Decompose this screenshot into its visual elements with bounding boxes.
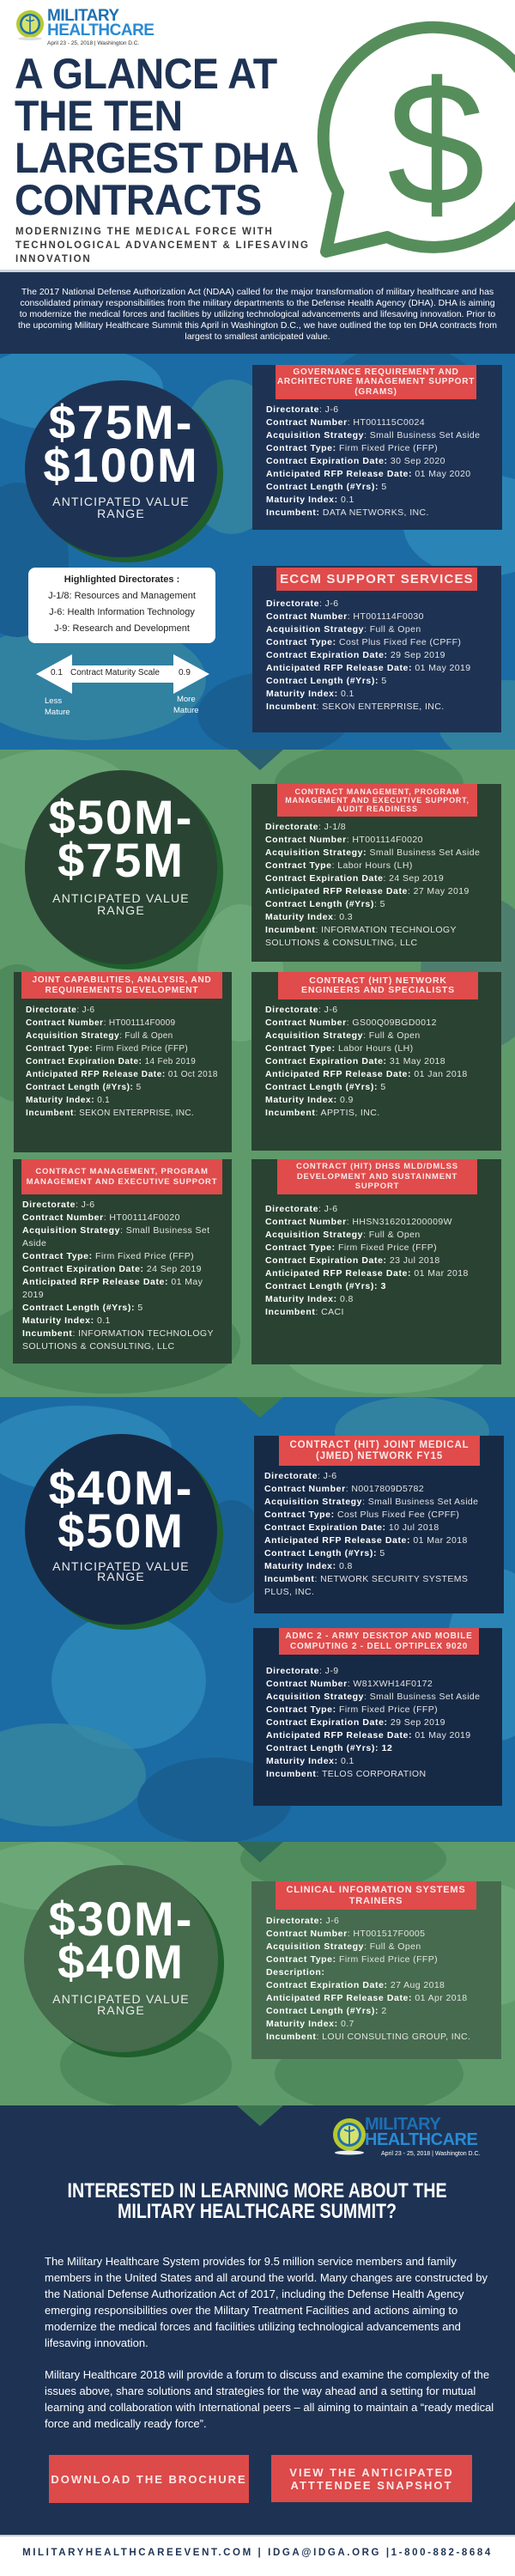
icon: logo emblem xyxy=(16,10,44,40)
card: GRAMS: Maturity Index: 0.1 xyxy=(266,495,354,505)
card: JMED network: Acquisition Strategy: Small Business Set Aside xyxy=(264,1497,478,1507)
card: ADMC 2: Anticipated RFP Release Date: 01 May 2019 xyxy=(266,1730,471,1741)
heading: interested in learning more: INTERESTED IN LEARNING MORE ABOUT THE xyxy=(68,2179,447,2202)
card: contract management executive support: Contract Expiration Date: 24 Sep 2019 xyxy=(22,1264,202,1274)
text block: summit description: The Military Healthcare System provides for 9.5 million service members and family members in the United States and all around the world. Many changes are constructed by the National Defense Authorization Act of 2017, including the Defense Health Agency emerging responsibilities over the Military Treatment Facilities and actions aiming to modernize the medical forces and facilities utilizing technological advancements and lifesaving innovation. xyxy=(45,2255,488,2349)
footer logo: MILITARY xyxy=(365,2115,440,2134)
card: network engineers: Incumbent: APPTIS, INC. xyxy=(265,1108,380,1118)
circle: $50M-$75M: $75M xyxy=(58,833,185,887)
card: ECCM: Incumbent: SEKON ENTERPRISE, INC. xyxy=(266,702,445,712)
card: contract management executive support xyxy=(13,1159,232,1364)
card: network engineers: Contract Length (#Yrs): 5 xyxy=(265,1082,386,1092)
circle: $30M-$40M: ANTICIPATED VALUE xyxy=(52,1992,190,2006)
card: ECCM: Directorate: J-6 xyxy=(266,598,338,609)
card: contract management audit readiness: Contract Number: HT001114F0020 xyxy=(265,835,423,845)
title xyxy=(15,50,299,224)
card: JMED network: Contract Expiration Date: 10 Jul 2018 xyxy=(264,1522,439,1533)
card: JMED network: Maturity Index: 0.8 xyxy=(264,1561,353,1571)
highlighted directorates box: J-1/8: Resources and Management xyxy=(48,591,196,601)
heading: interested in learning more xyxy=(68,2179,447,2223)
circle: $40M-$50M: RANGE xyxy=(97,1570,145,1583)
card: JMED network: Contract Length (#Yrs): 5 xyxy=(264,1548,385,1558)
arrow: contract maturity scale: 0.9 xyxy=(179,668,191,677)
circle: $30M-$40M: $40M xyxy=(58,1935,185,1989)
card: clinical information systems trainers: Contract Number: HT001517F0005 xyxy=(266,1929,425,1939)
card: contract management executive support: Directorate: J-6 xyxy=(22,1200,94,1210)
card: ECCM: ECCM SUPPORT SERVICES xyxy=(280,572,474,586)
circle: $75M-$100M: $100M xyxy=(43,438,199,492)
card: network engineers xyxy=(251,972,501,1151)
button: attendee snapshot: VIEW THE ANTICIPATED xyxy=(289,2466,454,2478)
card: joint capabilities: Acquisition Strategy: Full & Open xyxy=(26,1031,173,1041)
card: contract management audit readiness: Contract Type: Labor Hours (LH) xyxy=(265,860,413,871)
card: joint capabilities xyxy=(14,972,232,1152)
circle: $40M-$50M: $40M- xyxy=(49,1461,193,1515)
card: contract management audit readiness: CONTRACT MANAGEMENT, PROGRAM MANAGEMENT AND EXECUTIVE SUPPORT, AUDIT READINESS xyxy=(285,787,470,813)
card: GRAMS: Contract Expiration Date: 30 Sep 2020 xyxy=(266,456,445,466)
card: clinical information systems trainers: Contract Length (#Yrs): 2 xyxy=(266,2006,387,2016)
card: JMED network: Incumbent: NETWORK SECURITY SYSTEMS PLUS, INC. xyxy=(264,1574,468,1597)
circle: $75M-$100M: ANTICIPATED VALUE xyxy=(52,495,190,508)
logo text: MILITARY xyxy=(47,7,119,25)
arrow: contract maturity scale: 0.1 xyxy=(51,668,63,677)
highlighted directorates box xyxy=(28,568,215,643)
card: clinical information systems trainers: Incumbent: LOUI CONSULTING GROUP, INC. xyxy=(266,2032,470,2042)
card: joint capabilities: Directorate: J-6 xyxy=(26,1005,94,1015)
card: network engineers: Anticipated RFP Release Date: 01 Jan 2018 xyxy=(265,1069,468,1079)
panel: $30M-$40M section xyxy=(0,1842,515,2105)
card: joint capabilities: JOINT CAPABILITIES, ANALYSIS, AND REQUIREMENTS DEVELOPMENT xyxy=(32,975,211,994)
intro band xyxy=(0,270,515,354)
arrow: contract maturity scale xyxy=(36,654,209,717)
card: ADMC 2 xyxy=(253,1628,502,1806)
card: JMED network: Contract Number: N0017809D5782 xyxy=(264,1484,424,1494)
text block: summit description xyxy=(45,2255,494,2430)
card: DHSS MLD/DMLSS: Incumbent: CACI xyxy=(265,1307,344,1317)
card: GRAMS: Anticipated RFP Release Date: 01 May 2020 xyxy=(266,469,471,479)
card: network engineers: Acquisition Strategy: Full & Open xyxy=(265,1030,421,1041)
icon: dollar speech bubble: $ xyxy=(387,46,485,242)
card: DHSS MLD/DMLSS: Acquisition Strategy: Full & Open xyxy=(265,1230,421,1240)
card: ADMC 2: Contract Expiration Date: 29 Sep 2019 xyxy=(266,1717,445,1728)
card: contract management audit readiness: Contract Expiration Date: 24 Sep 2019 xyxy=(265,873,444,884)
card: clinical information systems trainers: CLINICAL INFORMATION SYSTEMS TRAINERS xyxy=(287,1884,465,1906)
card: clinical information systems trainers: Acquisition Strategy: Full & Open xyxy=(266,1941,421,1952)
card: network engineers: Contract Type: Labor Hours (LH) xyxy=(265,1043,414,1054)
circle: $40M-$50M: ANTICIPATED VALUE xyxy=(52,1559,190,1573)
card: network engineers: Maturity Index: 0.9 xyxy=(265,1095,354,1105)
card: ECCM xyxy=(252,566,501,732)
arrow: contract maturity scale: More xyxy=(177,695,196,704)
intro band: The 2017 National Defense Authorization Act (NDAA) called for the major transformation of military healthcare and has consolidated primary responsibilities from the military departments to the Defense Health Agency (DHA). DHA is aiming to modernize the medical forces and facilities by utilizing technological advancements and lifesaving innovation. Prior to the upcoming Military Healthcare Summit this April in Washington D.C., we have outlined the top ten DHA contracts from largest to smallest anticipated value. xyxy=(18,287,497,342)
highlighted directorates box: Highlighted Directorates : xyxy=(64,574,179,585)
highlighted directorates box: J-6: Health Information Technology xyxy=(49,607,195,617)
card: contract management audit readiness: Directorate: J-1/8 xyxy=(265,822,346,832)
card: ADMC 2: Maturity Index: 0.1 xyxy=(266,1756,354,1766)
card: GRAMS: Contract Number: HT001115C0024 xyxy=(266,417,425,428)
card: DHSS MLD/DMLSS: CONTRACT (HIT) DHSS MLD/DMLSS DEVELOPMENT AND SUSTAINMENT SUPPORT xyxy=(296,1162,458,1191)
card: ADMC 2: ADMC 2 - ARMY DESKTOP AND MOBILE COMPUTING 2 - DELL OPTIPLEX 9020 xyxy=(285,1631,473,1650)
card: DHSS MLD/DMLSS xyxy=(251,1159,501,1364)
circle: $75M-$100M: RANGE xyxy=(97,507,145,520)
card: JMED network: Directorate: J-6 xyxy=(264,1471,336,1481)
arrow: contract maturity scale: Mature xyxy=(45,708,70,717)
card: JMED network: Contract Type: Cost Plus Fixed Fee (CPFF) xyxy=(264,1510,459,1520)
card: DHSS MLD/DMLSS: Contract Expiration Date: 23 Jul 2018 xyxy=(265,1255,440,1266)
card: contract management audit readiness: Incumbent: INFORMATION TECHNOLOGY SOLUTIONS & CONSULTING, LLC xyxy=(265,925,457,948)
card: ECCM: Anticipated RFP Release Date: 01 May 2019 xyxy=(266,663,471,673)
card: DHSS MLD/DMLSS: Maturity Index: 0.8 xyxy=(265,1294,354,1304)
arrow: contract maturity scale: Contract Maturity Scale xyxy=(70,668,160,677)
logo text: HEALTHCARE xyxy=(47,21,154,39)
circle: $30M-$40M: RANGE xyxy=(97,2003,145,2017)
card: network engineers: Directorate: J-6 xyxy=(265,1005,337,1015)
card: joint capabilities: Incumbent: SEKON ENTERPRISE, INC. xyxy=(26,1109,194,1118)
card: ECCM: Acquisition Strategy: Full & Open xyxy=(266,624,421,635)
card: contract management executive support: Anticipated RFP Release Date: 01 May 2019 xyxy=(22,1277,203,1300)
card: clinical information systems trainers: Contract Expiration Date: 27 Aug 2018 xyxy=(266,1980,445,1990)
title: THE TEN xyxy=(15,92,183,140)
panel: footer call to action xyxy=(0,2105,515,2535)
text block: summit description: Military Healthcare 2018 will provide a forum to discuss and examine the complexity of the issues above, share solutions and strategies for the way ahead and a setting for mutual learning and collaboration with International peers – all aiming to maintain a “ready medical force and medically ready force”. xyxy=(45,2368,494,2430)
card: contract management audit readiness xyxy=(251,784,501,962)
card: ADMC 2: Contract Type: Firm Fixed Price (FFP) xyxy=(266,1704,438,1715)
circle: $30M-$40M: $30M- xyxy=(49,1892,193,1946)
logo text xyxy=(47,7,154,39)
button: attendee snapshot xyxy=(271,2455,472,2502)
heading: interested in learning more: MILITARY HEALTHCARE SUMMIT? xyxy=(118,2200,397,2223)
card: joint capabilities: Maturity Index: 0.1 xyxy=(26,1096,110,1105)
footer logo: HEALTHCARE xyxy=(365,2130,477,2149)
footer logo: April 23 - 25, 2018 | Washington D.C. xyxy=(381,2151,481,2157)
card: GRAMS: Contract Length (#Yrs): 5 xyxy=(266,482,387,492)
card: ADMC 2: Acquisition Strategy: Small Business Set Aside xyxy=(266,1692,480,1702)
circle: $75M-$100M: $75M- xyxy=(49,395,193,449)
card: joint capabilities: Contract Number: HT001114F0009 xyxy=(26,1018,175,1028)
card: network engineers: CONTRACT (HIT) NETWORK ENGINEERS AND SPECIALISTS xyxy=(301,975,455,995)
circle: $75M-$100M xyxy=(25,380,217,557)
panel: $40M-$50M section xyxy=(0,1397,515,1842)
panel: $50M-$75M section xyxy=(0,750,515,1397)
footer contact line: MILITARYHEALTHCAREEVENT.COM | IDGA@IDGA.ORG |1-800-882-8684 xyxy=(22,2548,493,2558)
card: DHSS MLD/DMLSS: Contract Number: HHSN316201200009W xyxy=(265,1217,452,1227)
circle: $50M-$75M: RANGE xyxy=(97,903,145,917)
arrow: contract maturity scale: Mature xyxy=(173,706,199,715)
card: joint capabilities: Contract Expiration Date: 14 Feb 2019 xyxy=(26,1057,196,1066)
card: JMED network: Anticipated RFP Release Date: 01 Mar 2018 xyxy=(264,1535,468,1546)
card: ECCM: Contract Length (#Yrs): 5 xyxy=(266,676,387,686)
card: JMED network: CONTRACT (HIT) JOINT MEDICAL (JMED) NETWORK FY15 xyxy=(290,1439,469,1461)
card: contract management executive support: Contract Type: Firm Fixed Price (FFP) xyxy=(22,1251,194,1261)
card: ADMC 2: Incumbent: TELOS CORPORATION xyxy=(266,1769,426,1779)
card: contract management audit readiness: Contract Length (#Yrs): 5 xyxy=(265,899,385,909)
card: contract management executive support: Contract Length (#Yrs): 5 xyxy=(22,1303,143,1313)
button: download brochure: DOWNLOAD THE BROCHURE xyxy=(51,2473,247,2485)
card: contract management executive support: Incumbent: INFORMATION TECHNOLOGY SOLUTIONS & CONSULTING, LLC xyxy=(22,1328,214,1352)
card: joint capabilities: Contract Type: Firm Fixed Price (FFP) xyxy=(26,1044,188,1054)
card: DHSS MLD/DMLSS: Contract Type: Firm Fixed Price (FFP) xyxy=(265,1242,437,1253)
highlighted directorates box: J-9: Research and Development xyxy=(54,623,190,634)
footer logo xyxy=(333,2115,481,2157)
circle: $50M-$75M: ANTICIPATED VALUE xyxy=(52,891,190,905)
card: network engineers: Contract Number: GS00Q09BGD0012 xyxy=(265,1018,437,1028)
circle: $30M-$40M xyxy=(24,1865,218,2052)
card: joint capabilities: Contract Length (#Yrs): 5 xyxy=(26,1083,141,1092)
card: clinical information systems trainers: Anticipated RFP Release Date: 01 Apr 2018 xyxy=(266,1993,467,2003)
title: CONTRACTS xyxy=(15,176,262,224)
circle: $40M-$50M: $50M xyxy=(58,1504,185,1558)
subtitle: MODERNIZING THE MEDICAL FORCE WITH TECHNOLOGICAL ADVANCEMENT & LIFESAVING INNOVATION xyxy=(15,227,310,264)
card: ADMC 2: Contract Length (#Yrs): 12 xyxy=(266,1743,392,1753)
circle: $40M-$50M xyxy=(25,1434,217,1625)
card: clinical information systems trainers: Contract Type: Firm Fixed Price (FFP) xyxy=(266,1954,438,1965)
card: network engineers: Contract Expiration Date: 31 May 2018 xyxy=(265,1056,445,1066)
button: attendee snapshot: ATTTENDEE SNAPSHOT xyxy=(291,2478,452,2492)
circle: $50M-$75M: $50M- xyxy=(49,790,193,844)
card: ADMC 2: Directorate: J-9 xyxy=(266,1666,338,1676)
card: contract management audit readiness: Anticipated RFP Release Date: 27 May 2019 xyxy=(265,886,470,896)
card: clinical information systems trainers: Maturity Index: 0.7 xyxy=(266,2019,354,2029)
card: DHSS MLD/DMLSS: Directorate: J-6 xyxy=(265,1204,337,1214)
card: contract management executive support: Maturity Index: 0.1 xyxy=(22,1315,111,1326)
card: contract management executive support: Contract Number: HT001114F0020 xyxy=(22,1212,180,1223)
card: DHSS MLD/DMLSS: Anticipated RFP Release Date: 01 Mar 2018 xyxy=(265,1268,469,1279)
card: ECCM: Maturity Index: 0.1 xyxy=(266,689,354,699)
card: ECCM: Contract Number: HT001114F0030 xyxy=(266,611,424,622)
icon: dollar speech bubble xyxy=(318,21,515,258)
card: ADMC 2: Contract Number: W81XWH14F0172 xyxy=(266,1679,433,1689)
card: GRAMS xyxy=(252,365,502,530)
card: contract management executive support: Acquisition Strategy: Small Business Set Aside xyxy=(22,1225,209,1249)
title: A GLANCE AT xyxy=(15,50,277,98)
card: GRAMS: Acquisition Strategy: Small Business Set Aside xyxy=(266,430,480,440)
footer contact line xyxy=(0,2535,515,2576)
circle: $50M-$75M xyxy=(25,770,217,964)
card: GRAMS: GOVERNANCE REQUIREMENT AND ARCHITECTURE MANAGEMENT SUPPORT (GRAMS) xyxy=(277,368,475,397)
card: clinical information systems trainers: Directorate: J-6 xyxy=(266,1916,339,1926)
card: DHSS MLD/DMLSS: Contract Length (#Yrs): 3 xyxy=(265,1281,386,1291)
button: download brochure xyxy=(49,2455,249,2503)
card: joint capabilities: Anticipated RFP Release Date: 01 Oct 2018 xyxy=(26,1070,218,1079)
card: GRAMS: Incumbent: DATA NETWORKS, INC. xyxy=(266,507,429,518)
card: contract management audit readiness: Maturity Index: 0.3 xyxy=(265,912,353,922)
header logo: April 23 - 25, 2018 | Washington D.C. xyxy=(47,40,139,46)
card: ECCM: Contract Type: Cost Plus Fixed Fee (CPFF) xyxy=(266,637,461,647)
panel: $75M-$100M section xyxy=(0,354,515,750)
card: contract management executive support: CONTRACT MANAGEMENT, PROGRAM MANAGEMENT AND EXECUTIVE SUPPORT xyxy=(27,1167,217,1187)
header logo xyxy=(16,7,154,46)
title: LARGEST DHA xyxy=(15,134,299,182)
arrow: contract maturity scale: Less xyxy=(45,696,62,706)
card: contract management audit readiness: Acquisition Strategy: Small Business Set Aside xyxy=(265,848,480,858)
card: clinical information systems trainers xyxy=(251,1881,501,2059)
card: clinical information systems trainers: Description: xyxy=(266,1967,324,1978)
card: JMED network xyxy=(254,1436,504,1613)
card: GRAMS: Directorate: J-6 xyxy=(266,404,338,415)
card: GRAMS: Contract Type: Firm Fixed Price (FFP) xyxy=(266,443,438,453)
card: ECCM: Contract Expiration Date: 29 Sep 2019 xyxy=(266,650,445,660)
